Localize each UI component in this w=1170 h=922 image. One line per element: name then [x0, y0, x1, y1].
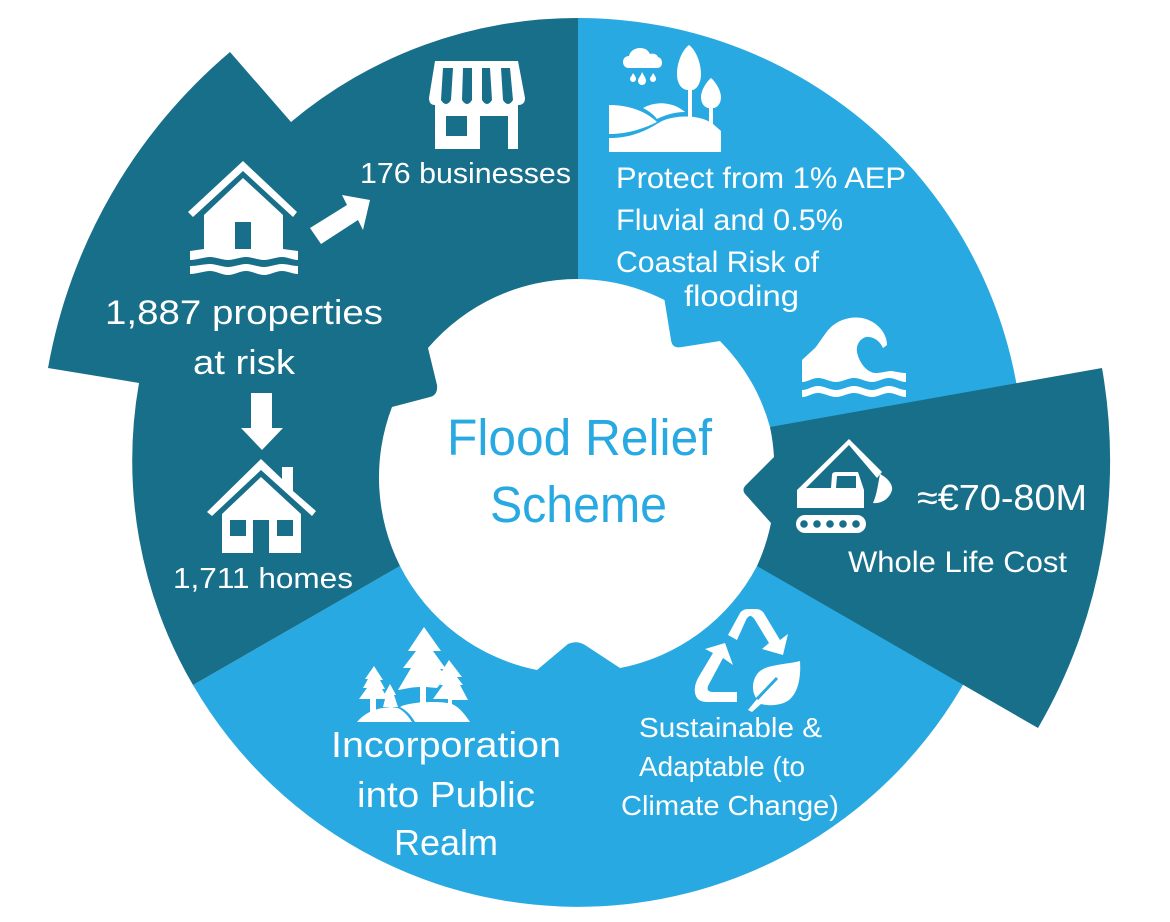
- text: protection standard: Coastal Risk of: [616, 246, 820, 279]
- icon: excavator: [796, 439, 892, 533]
- arrow: to homes: [241, 393, 283, 450]
- text: protection standard: flooding: [684, 280, 799, 313]
- text: incorporation into public realm: Realm: [394, 822, 498, 863]
- text: sustainable and adaptable: Sustainable &: [639, 712, 822, 743]
- text: cost range: ≈€70-80M: [917, 477, 1087, 518]
- icon: landscape with rain and trees: [609, 45, 721, 152]
- title: flood relief scheme: Flood Relief: [447, 409, 713, 466]
- title: flood relief scheme: [447, 409, 713, 533]
- text: 1,711 homes: 1,711 homes: [173, 563, 353, 595]
- panel: whole life cost (right, dark arrow): [744, 368, 1110, 728]
- arrow: to businesses: [310, 195, 370, 244]
- panel: protection standard (top right, blue): [578, 18, 1023, 440]
- panel: properties at risk (left, dark arrow): [48, 18, 578, 685]
- icon: shop: [429, 61, 525, 149]
- icon: wave: [802, 317, 906, 397]
- icon: flooded house: [188, 161, 298, 275]
- panel: public realm and sustainability (bottom, blue): [193, 566, 1001, 907]
- title: flood relief scheme: Scheme: [490, 476, 667, 533]
- text: 1,887 properties at risk: at risk: [193, 344, 296, 382]
- text: incorporation into public realm: into Public: [357, 774, 535, 815]
- icon: home: [207, 459, 316, 553]
- text: sustainable and adaptable: Adaptable (to: [639, 751, 805, 782]
- text: incorporation into public realm: Incorporation: [331, 724, 561, 765]
- text: sustainable and adaptable: Climate Change): [621, 790, 839, 821]
- icon: recycling arrows and leaf: [695, 609, 800, 712]
- text: protection standard: Protect from 1% AEP: [616, 162, 906, 195]
- text: sustainable and adaptable: [621, 712, 839, 821]
- icon: trees on hills: [357, 627, 470, 722]
- text: protection standard: [616, 162, 906, 313]
- text: protection standard: Fluvial and 0.5%: [616, 204, 843, 237]
- text: 1,887 properties at risk: [105, 294, 383, 382]
- text: incorporation into public realm: [331, 724, 561, 863]
- text: 1,887 properties at risk: 1,887 properties: [105, 294, 383, 332]
- text: 176 businesses: 176 businesses: [360, 158, 571, 190]
- text: whole life cost: Whole Life Cost: [848, 546, 1068, 579]
